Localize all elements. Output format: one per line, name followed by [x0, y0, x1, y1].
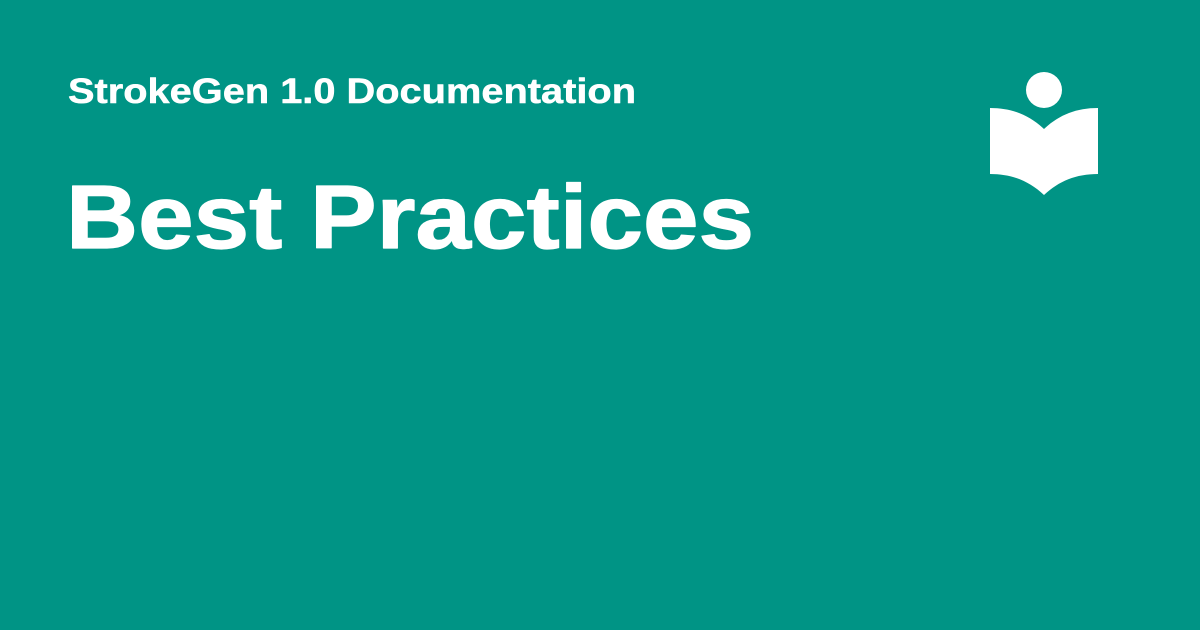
title: Best Practices: Best Practices: [66, 168, 754, 268]
icon: person reading open book: [990, 72, 1098, 195]
subtitle: StrokeGen 1.0 Documentation: StrokeGen 1.0 Documentation: [68, 72, 636, 111]
